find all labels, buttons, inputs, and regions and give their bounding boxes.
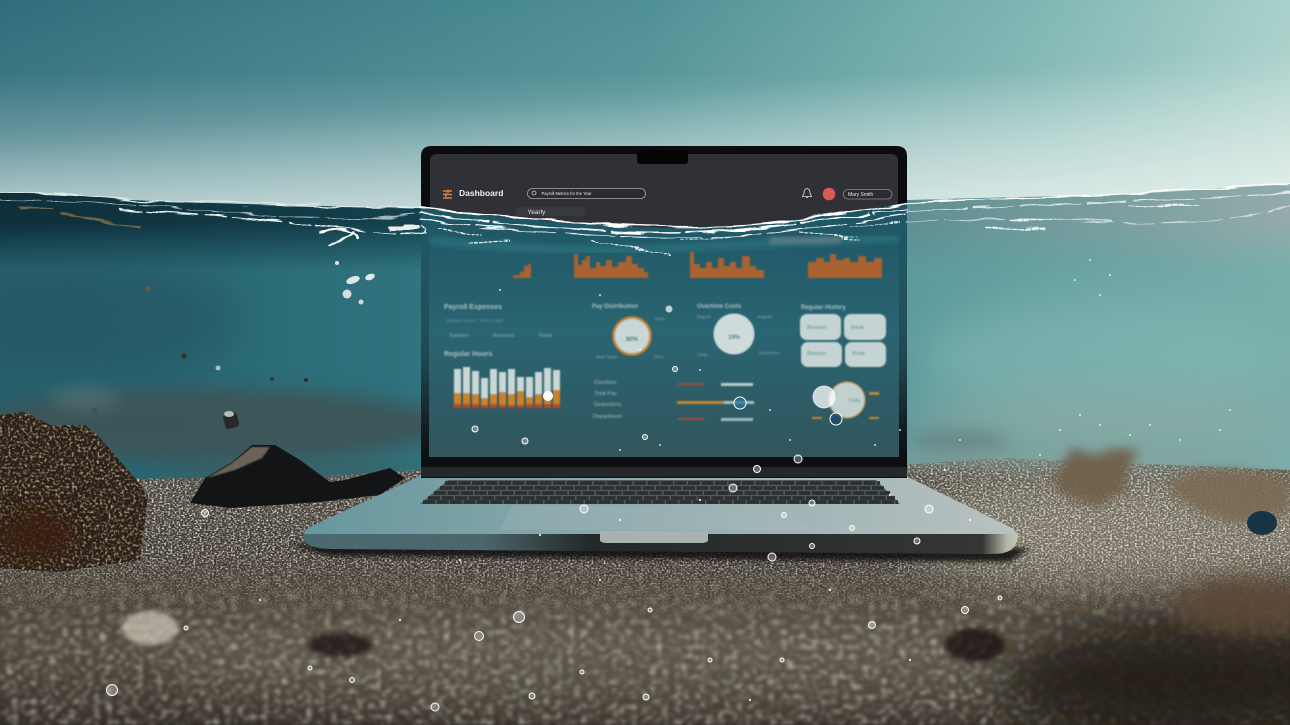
chart 3 <box>690 252 764 278</box>
heading: Regular Hours <box>444 351 492 358</box>
chart 2 <box>574 254 648 278</box>
panel: pay list: Department <box>593 414 622 420</box>
heading: Pay Distribution <box>592 304 638 310</box>
card 1: Bonuses <box>807 325 827 331</box>
search box <box>528 188 646 198</box>
legend: Totals <box>697 352 707 357</box>
screen top above water <box>430 154 898 230</box>
panel: pay distribution donut <box>592 304 666 359</box>
panel: regular history cards <box>800 305 886 367</box>
dashboard header <box>443 188 892 216</box>
subheading: Salaries report - Year to date <box>446 318 504 323</box>
legend: Regular <box>758 314 773 319</box>
panel: bottom right donut <box>812 382 879 419</box>
chart 1 <box>513 264 531 278</box>
tabs: Totals <box>538 333 553 339</box>
panel: pay list <box>593 380 622 420</box>
laptop base <box>303 476 1018 554</box>
laptop <box>290 146 1030 562</box>
sea floor <box>0 455 1290 725</box>
legend <box>697 314 781 357</box>
value: 19% <box>728 335 741 341</box>
lid side edges <box>421 225 907 457</box>
avatar <box>823 188 835 200</box>
legend <box>596 316 666 359</box>
user name pill <box>844 190 892 199</box>
donut <box>614 318 650 354</box>
card 3: Bonuses <box>807 351 827 357</box>
menu icon <box>443 190 452 198</box>
panel: regular hours chart <box>444 351 560 408</box>
panel: payroll expenses <box>444 304 553 339</box>
laptop shadow <box>290 545 1030 562</box>
tiny water specks <box>259 259 1231 701</box>
panel: pay list: Overtime <box>594 380 616 386</box>
dashboard title: Dashboard <box>459 188 503 198</box>
legend: Department <box>759 350 781 355</box>
legend marks <box>812 392 879 419</box>
legend: Other <box>655 316 666 321</box>
water surface waves <box>0 184 1290 254</box>
keyboard <box>420 480 900 504</box>
tabs <box>449 333 553 339</box>
laptop lid frame <box>421 146 907 230</box>
yearly dropdown: Yearly <box>528 209 546 216</box>
tabs: Bonuses <box>493 333 515 339</box>
card 4: Break <box>852 351 866 357</box>
legend: Regular <box>697 314 712 319</box>
screen below water <box>421 203 907 457</box>
stacked bars <box>454 367 560 408</box>
panel: overtime costs donut <box>697 304 781 357</box>
panel: slider bars <box>677 383 754 421</box>
yearly dropdown <box>515 207 585 216</box>
legend: Base Salary <box>596 354 618 359</box>
heading: Regular History <box>801 305 846 311</box>
heading: Payroll Expenses <box>444 304 502 311</box>
chart 4 <box>808 254 882 278</box>
water bubbles <box>106 306 1002 711</box>
donut <box>829 382 865 418</box>
user name pill: Mary Smith <box>848 192 874 198</box>
sky background <box>0 0 1290 208</box>
rocks on the left <box>0 405 405 575</box>
underwater background <box>0 180 1290 500</box>
donut <box>714 314 754 354</box>
value: 80% <box>626 337 639 343</box>
camera notch <box>637 150 688 164</box>
seaweed on the right <box>1052 448 1290 535</box>
value: Daily <box>849 398 861 404</box>
lid bottom bezel <box>421 457 907 478</box>
search box: Payroll Metrics for the Year <box>542 191 592 196</box>
notification bell <box>802 188 812 198</box>
fog along the sea floor edge <box>160 448 1280 478</box>
heading: Overtime Costs <box>697 304 742 310</box>
underwater tint streaks <box>430 238 898 250</box>
panel: pay list: Total Pay <box>594 391 617 397</box>
tabs: Salaries <box>449 333 469 339</box>
legend: Other <box>654 354 665 359</box>
debris and pebbles <box>92 261 376 430</box>
orange bar charts <box>513 252 882 278</box>
card 2: Break <box>851 325 865 331</box>
panel: pay list: Deductions <box>594 402 622 408</box>
